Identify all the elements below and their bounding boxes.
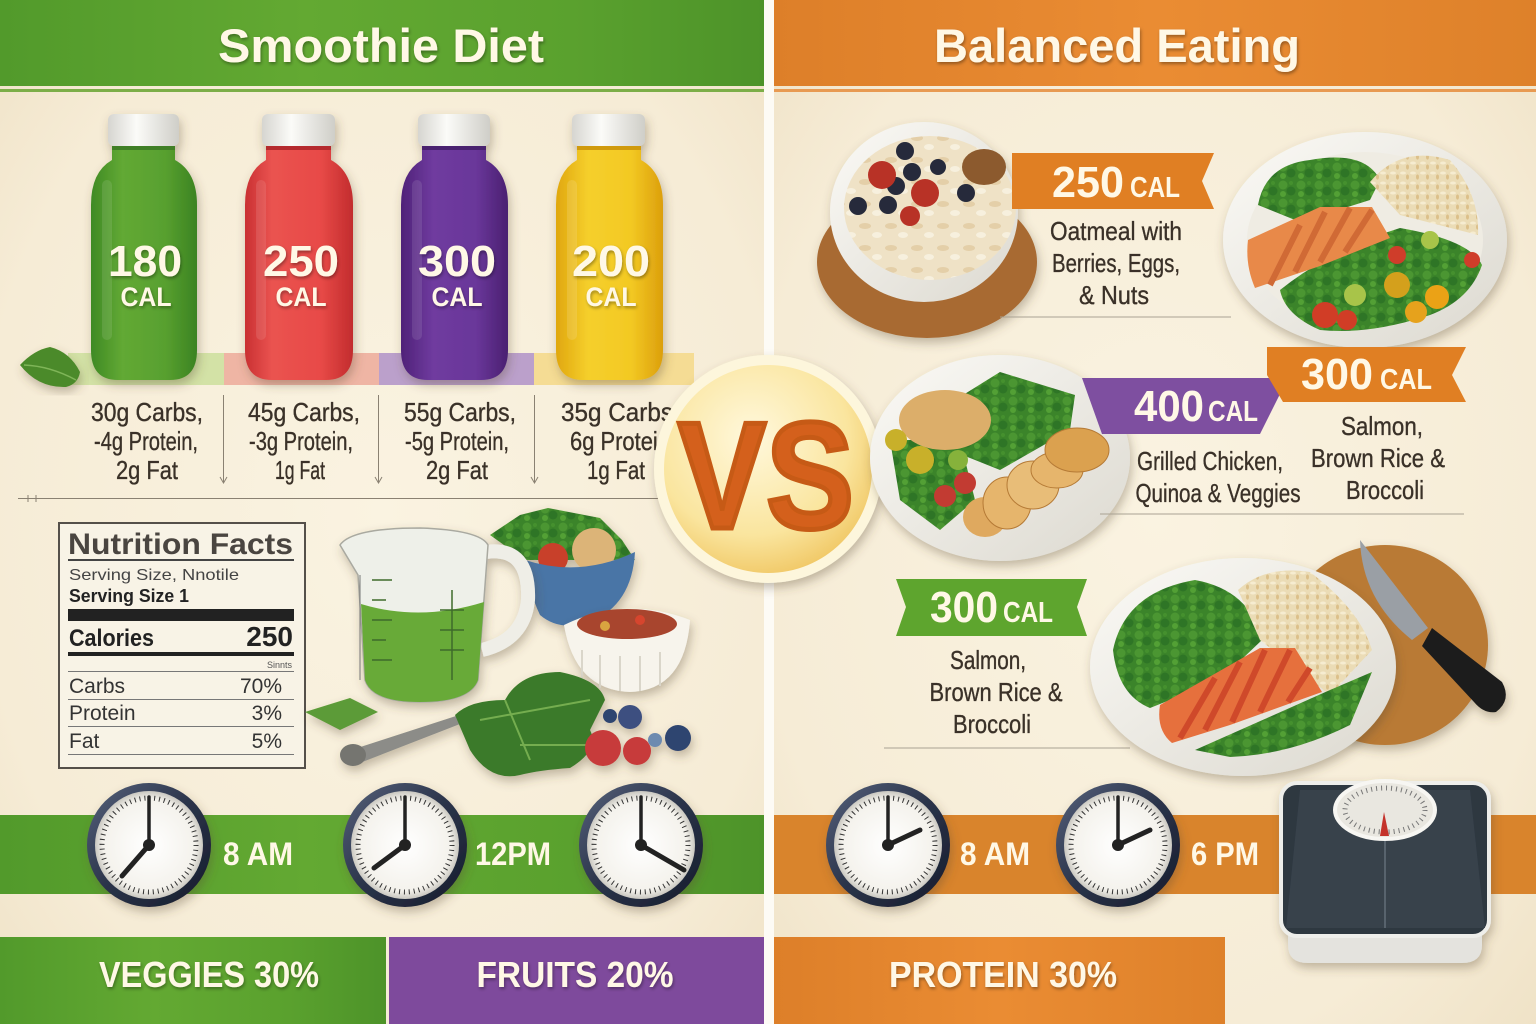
macros: purple bottle: 2g Fat [426, 455, 489, 485]
icon: bathroom scale [1281, 781, 1489, 963]
illustration: blue bowl with salad [490, 508, 635, 626]
macros: green bottle [91, 397, 203, 485]
caption: salmon: Broccoli [1346, 475, 1424, 505]
bottle: purple 300 cal: 300 [418, 237, 496, 286]
header: Balanced Eating: Balanced Eating [934, 19, 1300, 72]
nutrition facts label: 3% [252, 702, 282, 725]
calorie tag: 300 salmon: 300 [1301, 350, 1373, 399]
caption: salmon 2: Brown Rice & [930, 677, 1062, 707]
bottle: red 250 cal [245, 114, 353, 380]
bottom bar: protein: PROTEIN 30% [889, 954, 1117, 995]
macros: green bottle: -4g Protein, [94, 426, 198, 456]
caption: salmon 2: Broccoli [953, 709, 1031, 739]
header: Smoothie Diet [0, 0, 764, 92]
macros: purple bottle [404, 397, 516, 485]
clock: 12PM [343, 783, 467, 907]
calorie tag: 250 oatmeal: CAL [1130, 172, 1180, 204]
macros: purple bottle: -5g Protein, [405, 426, 509, 456]
macros: yellow bottle: 1g Fat [587, 455, 646, 485]
calorie tag: 300 green: CAL [1003, 597, 1053, 629]
illustration: white bowl [564, 609, 690, 692]
calorie tag: 300 green: 300 [930, 583, 998, 632]
label: 8 AM right: 8 AM [960, 836, 1030, 872]
bottle: yellow 200 cal [556, 114, 663, 380]
caption: oatmeal: Berries, Eggs, [1052, 248, 1180, 278]
bottle: red 250 cal: CAL [276, 282, 326, 312]
header: Smoothie Diet: Smoothie Diet [218, 19, 544, 72]
calorie tag: 400 [1082, 378, 1288, 434]
nutrition facts label: 250 [246, 621, 293, 652]
meal: chicken broccoli plate [1090, 558, 1396, 776]
meal: salmon plate [1223, 132, 1507, 348]
macros: red bottle: 1g Fat [275, 455, 326, 485]
bottle: green 180 cal [91, 114, 197, 380]
nutrition facts label: 5% [252, 730, 282, 753]
label: 12PM: 12PM [475, 836, 551, 872]
label: 6 PM: 6 PM [1191, 836, 1259, 872]
macros: red bottle: -3g Protein, [249, 426, 353, 456]
VS badge [654, 355, 882, 583]
colour strips under bottles [68, 353, 694, 385]
calorie tag: 250 oatmeal [1012, 153, 1214, 209]
caption: salmon [1100, 411, 1464, 514]
bottom bar: protein [774, 937, 1225, 1024]
bottle: purple 300 cal [401, 114, 508, 380]
nutrition facts label: Serving Size 1 [69, 586, 189, 606]
calorie tag: 250 oatmeal: 250 [1052, 158, 1124, 207]
macros: green bottle: 2g Fat [116, 455, 179, 485]
meal: chicken plate [870, 355, 1130, 561]
caption: grilled chicken [1136, 446, 1300, 508]
caption: grilled chicken: Grilled Chicken, [1137, 446, 1283, 476]
illustration: measuring jug [340, 528, 528, 702]
icon: basil leaf [20, 347, 80, 387]
cutting board and knife [1282, 540, 1506, 745]
caption: oatmeal: & Nuts [1079, 280, 1149, 310]
bottle: green 180 cal: CAL [120, 282, 172, 312]
bottom bar: veggies [0, 937, 386, 1024]
nutrition facts label: Fat [69, 730, 100, 753]
macros: yellow bottle: 6g Protein [570, 426, 670, 456]
caption: grilled chicken: Quinoa & Veggies [1136, 478, 1300, 508]
macros: red bottle: 45g Carbs, [248, 397, 360, 427]
VS badge: VS [678, 391, 854, 561]
caption: salmon 2 [884, 645, 1130, 748]
bottle: yellow 200 cal: CAL [586, 282, 636, 312]
nutrition facts label: Protein [69, 702, 136, 725]
calorie tag: 400: 400 [1134, 382, 1204, 431]
caption: salmon 2: Salmon, [950, 645, 1026, 675]
calorie tag: 300 salmon: CAL [1380, 364, 1432, 396]
bottle: green 180 cal: 180 [108, 237, 182, 286]
nutrition facts label: Carbs [69, 675, 125, 698]
nutrition facts label [59, 523, 305, 768]
background: left panel [0, 0, 764, 1024]
meal: oatmeal bowl [817, 122, 1037, 338]
bottle: purple 300 cal: CAL [432, 282, 482, 312]
caption: salmon: Brown Rice & [1311, 443, 1445, 473]
bottom bar: fruits: FRUITS 20% [476, 954, 674, 995]
illustration: spinach and berries [305, 672, 691, 776]
macros: yellow bottle [561, 397, 673, 485]
nutrition facts label: Serving Size, Nnotile [69, 567, 239, 584]
nutrition facts label: Nutrition Facts [68, 528, 293, 561]
nutrition facts label: 70% [240, 675, 282, 698]
bottle: red 250 cal: 250 [263, 237, 339, 286]
clock: third left [579, 783, 703, 907]
nutrition facts label: Sinnts [267, 660, 292, 670]
caption: oatmeal [1000, 216, 1231, 317]
bottle: yellow 200 cal: 200 [572, 237, 650, 286]
clock: left 8 AM [87, 783, 211, 907]
bottom bar: veggies: VEGGIES 30% [99, 954, 319, 995]
nutrition facts label: Calories [69, 625, 154, 652]
caption: oatmeal: Oatmeal with [1050, 216, 1182, 246]
macros: purple bottle: 55g Carbs, [404, 397, 516, 427]
clock: right 6 PM [1056, 783, 1180, 907]
label: 8 AM left: 8 AM [223, 836, 293, 872]
background: right panel [774, 0, 1536, 1024]
calorie tag: 300 green [896, 579, 1087, 636]
macros: yellow bottle: 35g Carbs [561, 397, 673, 427]
caption: salmon: Salmon, [1341, 411, 1423, 441]
macros: green bottle: 30g Carbs, [91, 397, 203, 427]
calorie tag: 400: CAL [1208, 396, 1258, 428]
clock: right 8 AM [826, 783, 950, 907]
bottom bar: fruits [389, 937, 764, 1024]
time band left [0, 815, 764, 894]
time band right [774, 815, 1536, 894]
macros: red bottle [248, 397, 360, 485]
calorie tag: 300 salmon [1267, 347, 1466, 402]
header: Balanced Eating [774, 0, 1536, 92]
